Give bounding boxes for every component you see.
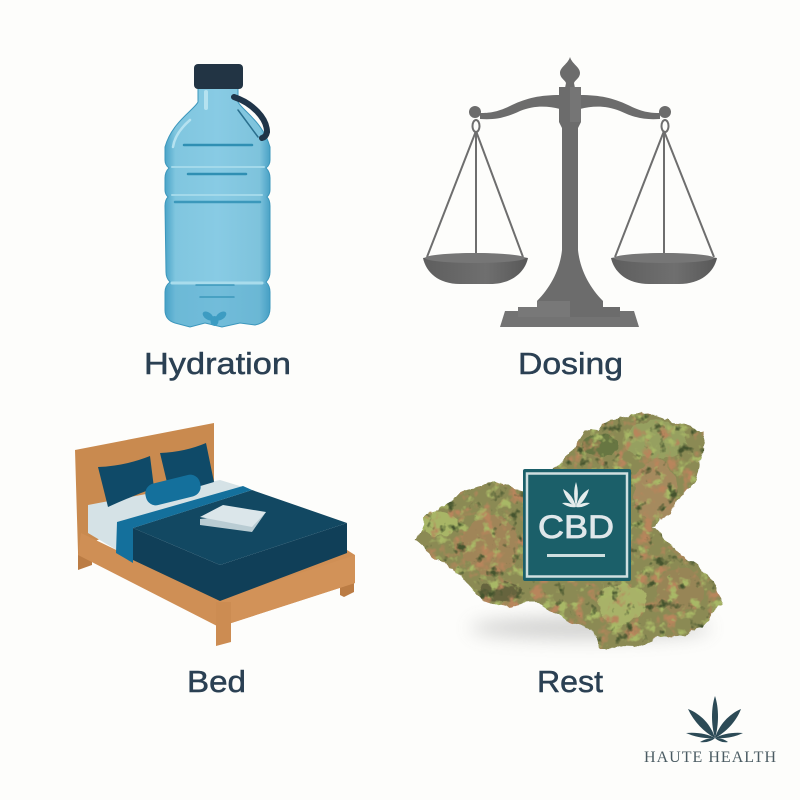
- panel: rest: [415, 412, 722, 699]
- icon: balance scale: [423, 57, 717, 327]
- scale chains: [427, 120, 714, 262]
- scale base: [500, 311, 639, 327]
- label: Bed: Bed: [187, 664, 246, 699]
- bolster: [143, 473, 203, 507]
- label: Hydration: Hydration: [144, 346, 291, 381]
- bottle lower shading: [165, 284, 270, 327]
- panel: hydration: [144, 64, 291, 381]
- badge rule: [547, 554, 605, 557]
- right pillow: [160, 443, 214, 495]
- icon: cannabis leaf: [686, 696, 743, 742]
- blanket band: [116, 486, 252, 563]
- label: Dosing: Dosing: [518, 346, 623, 381]
- buds: [415, 412, 722, 648]
- lime highlights: [422, 510, 458, 536]
- label: Rest: Rest: [537, 664, 603, 699]
- bed frame: [78, 533, 355, 627]
- icon: water bottle: [165, 64, 270, 327]
- bottle body: [165, 88, 270, 327]
- scale finial: [560, 57, 580, 88]
- badge text: CBD: [538, 509, 614, 545]
- back leg: [78, 545, 92, 570]
- left pillow: [98, 456, 154, 507]
- scale beam: [480, 95, 660, 119]
- panel: dosing: [423, 57, 717, 381]
- bottle cap: [194, 64, 243, 89]
- bottle base mark: [201, 310, 228, 326]
- bottle strap: [234, 97, 267, 138]
- dark clusters: [478, 582, 522, 602]
- left pan: [423, 253, 528, 284]
- headboard: [75, 423, 214, 552]
- logo wordmark: HAUTE HEALTH: [644, 749, 776, 766]
- badge leaf: [562, 482, 590, 507]
- mattress side: [133, 523, 347, 601]
- bottle ridges: [172, 92, 264, 297]
- CBD badge: [523, 469, 631, 581]
- right leg: [340, 575, 354, 597]
- white pad: [200, 505, 266, 532]
- front leg: [216, 602, 231, 646]
- icon: bed: [75, 423, 355, 646]
- sheet: [88, 480, 243, 555]
- right pan: [611, 253, 717, 284]
- bud shadow: [470, 617, 710, 639]
- scale column: [537, 87, 603, 310]
- mattress top: [133, 490, 347, 565]
- logo: Haute Health: [644, 696, 776, 766]
- brown clusters: [462, 515, 518, 575]
- panel: bed: [75, 423, 355, 699]
- icon: CBD flower: [415, 412, 722, 648]
